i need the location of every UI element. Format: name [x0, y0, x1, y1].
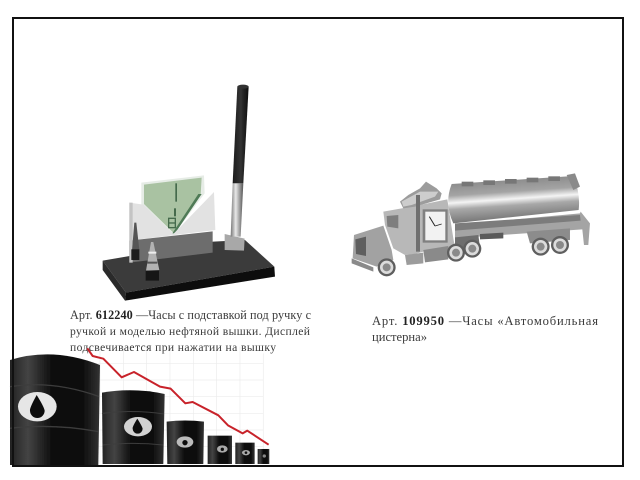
- faint chart grid behind barrels: [20, 347, 263, 463]
- clock holder plate: [129, 192, 215, 263]
- clock base: [103, 240, 275, 301]
- sixth barrel: [258, 449, 269, 464]
- second barrel: [102, 390, 165, 464]
- fourth barrel: [208, 436, 232, 464]
- truck clock face: [423, 209, 448, 243]
- fifth barrel: [235, 443, 255, 464]
- truck wheels: [378, 236, 569, 276]
- truck cab: [352, 182, 455, 272]
- caption: truck clock: [372, 314, 598, 344]
- product photo: desk clock with pen stand: [103, 85, 275, 301]
- pen: [231, 85, 249, 237]
- caption: truck clock: цистерна»: [372, 330, 427, 344]
- product photo: tanker truck clock: [352, 173, 590, 276]
- tanker body: [448, 173, 580, 223]
- miniature oil derrick front: [146, 242, 159, 281]
- caption: desk clock: ручкой и моделью нефтяной вышки. Дисплей: [70, 325, 310, 338]
- miniature oil derrick left: [131, 223, 139, 260]
- frame left and bottom edge over barrels: [13, 340, 623, 466]
- pen holder: [225, 234, 245, 251]
- caption: truck clock: Арт. 109950 —Часы «Автомобильная: [372, 314, 598, 328]
- red falling line: [87, 348, 269, 445]
- caption: desk clock: [70, 308, 312, 354]
- caption: desk clock: Арт. 612240 —Часы с подставкой под ручку с: [70, 308, 312, 322]
- caption: desk clock: подсвечивается при нажатии на вышку: [70, 341, 276, 354]
- third barrel: [167, 420, 204, 464]
- trailer chassis: [455, 212, 590, 249]
- clock LCD display: [141, 175, 205, 235]
- barrels falling chart: [10, 348, 269, 465]
- largest barrel: [10, 354, 100, 465]
